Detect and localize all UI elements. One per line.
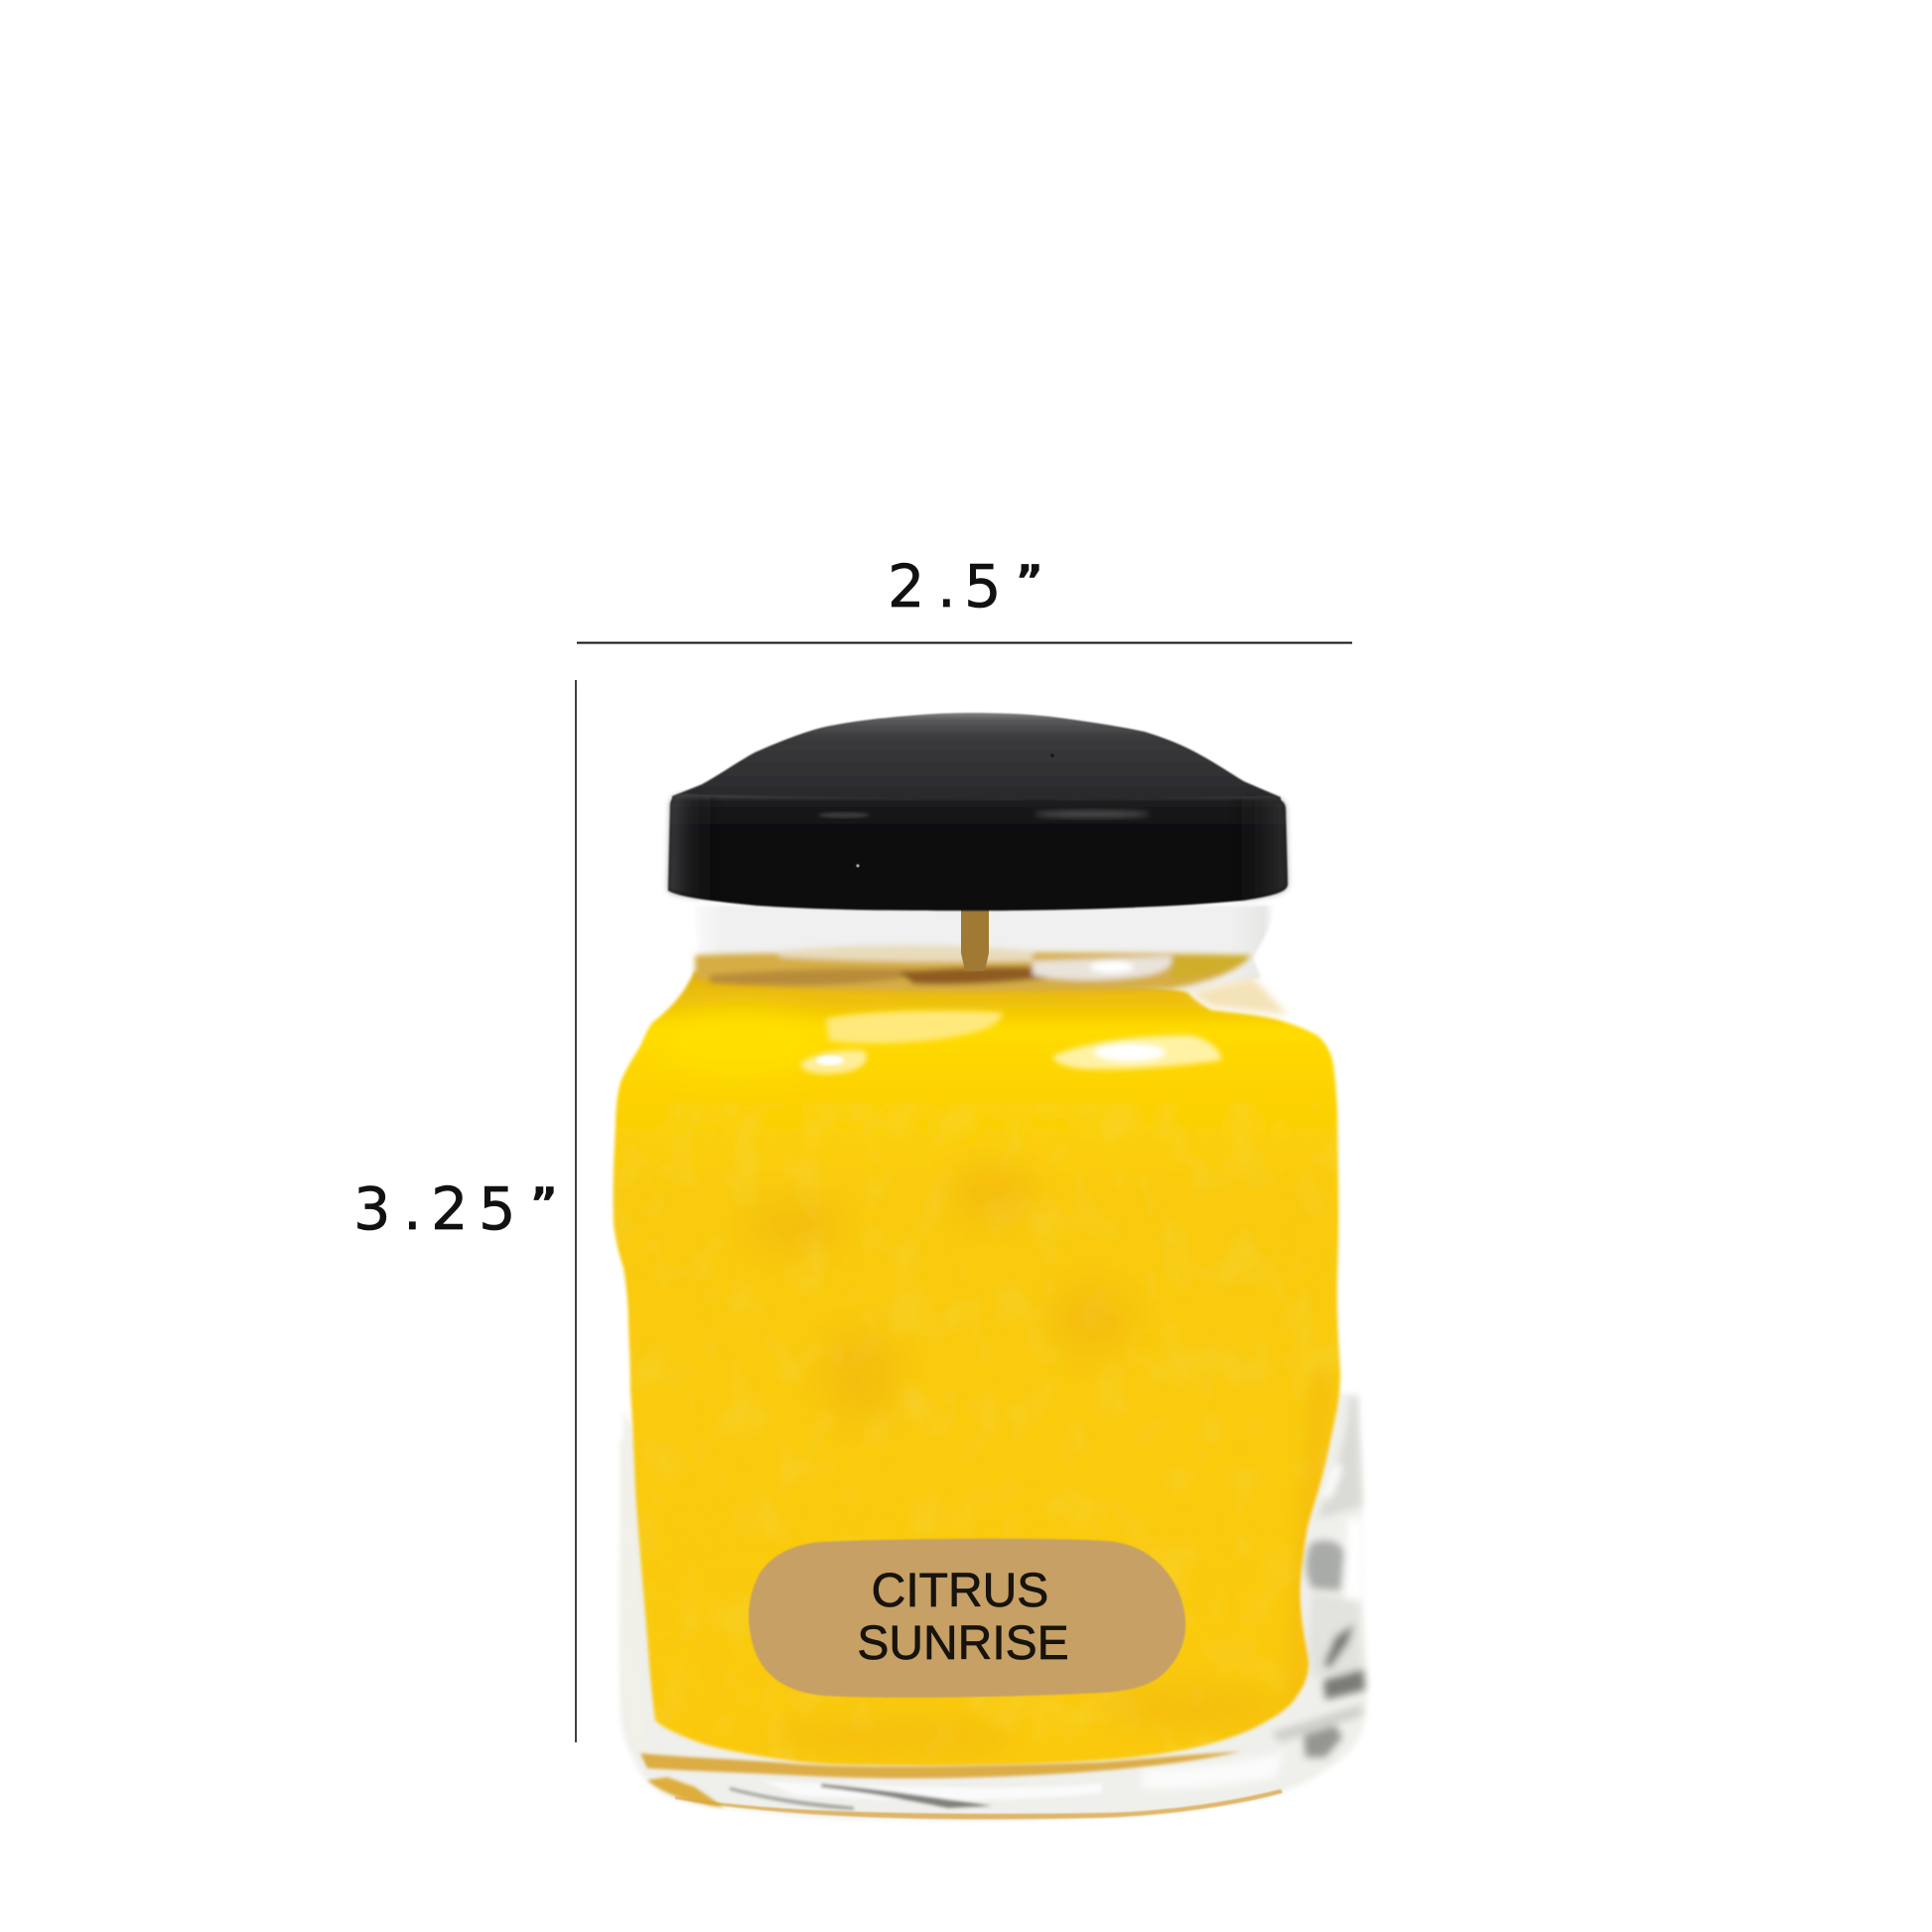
product label: CITRUS xyxy=(872,1565,1048,1617)
height dimension label: 3.25 inches xyxy=(353,680,576,1742)
height dimension label: 3.25 inches: 3.25 xyxy=(353,1174,516,1243)
lid edge shading xyxy=(668,794,1288,904)
lid highlight xyxy=(1035,810,1150,818)
darker right edge xyxy=(1281,1370,1332,1708)
reflection shading at lower right of glass xyxy=(1142,1395,1365,1789)
bottom wax rim xyxy=(640,1751,1241,1778)
candle jar xyxy=(596,713,1370,1820)
reflection streaks in glass base xyxy=(730,1781,1102,1810)
product label xyxy=(749,1539,1185,1698)
width dimension label: 2.5 inches xyxy=(577,552,1352,643)
wick xyxy=(961,907,989,971)
left glass edge xyxy=(621,1410,655,1752)
wax surface highlights xyxy=(800,1011,1221,1074)
width dimension label: 2.5 inches: ” xyxy=(1016,556,1043,605)
right shoulder haze xyxy=(1188,978,1288,1015)
width dimension label: 2.5 inches: 2.5 xyxy=(888,552,1002,621)
orange blotches xyxy=(750,1162,1281,1753)
lid xyxy=(668,713,1288,910)
bright upper left glow xyxy=(671,1002,810,1021)
product dimension diagram xyxy=(357,562,1370,1821)
glass jar base xyxy=(621,905,1367,1820)
wax fill xyxy=(596,968,1370,1820)
glass neck xyxy=(695,905,1274,993)
lid dome xyxy=(672,713,1281,806)
wax top surface xyxy=(695,945,1251,992)
height dimension label: 3.25 inches: ” xyxy=(530,1178,558,1227)
lid brim xyxy=(668,794,1288,910)
product label: SUNRISE xyxy=(857,1617,1069,1670)
